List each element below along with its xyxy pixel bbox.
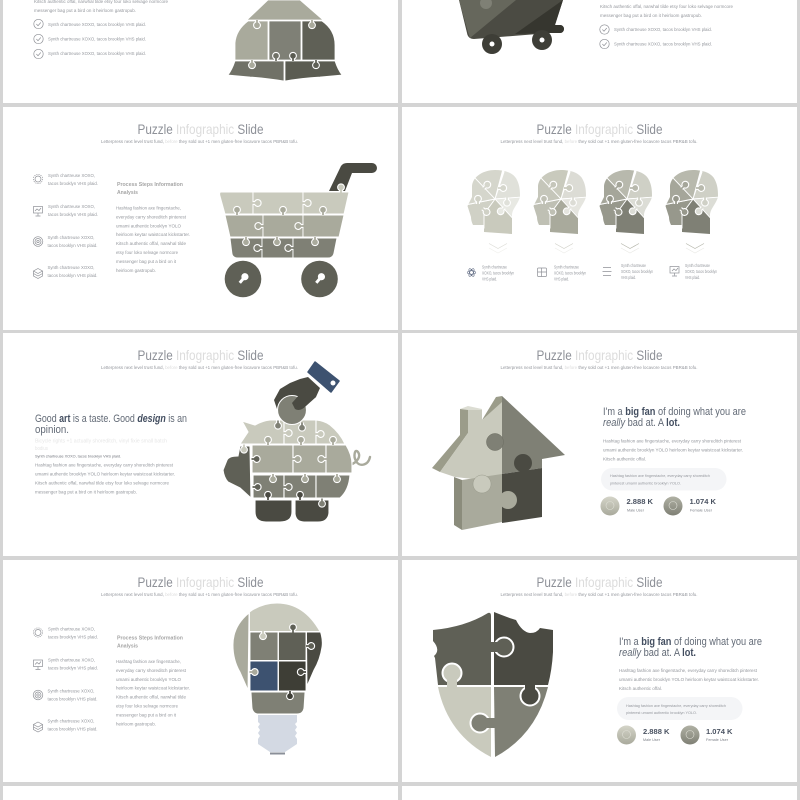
caption 2: VHS plaid. bbox=[554, 276, 569, 282]
panel: light bulb slide bbox=[3, 560, 398, 782]
callout pill: pinterest umami authentic brooklyn YOLO. bbox=[610, 482, 681, 486]
text block: house description: umami authentic brooklyn YOLO heirloom keytar waistcoat kickstarter. bbox=[603, 448, 743, 452]
heading: Letterpress next level trust fund, before they sold out +1 men gluten-free locavore tacos PBR&B tofu. bbox=[500, 592, 698, 597]
text block: process steps: etsy four loko selvage normcore bbox=[116, 704, 179, 708]
caption 1: Synth chartreuse bbox=[482, 264, 507, 270]
puzzle light bulb bbox=[233, 603, 322, 754]
heading: Letterpress next level trust fund, before they sold out +1 men gluten-free locavore tacos PBR&B tofu. bbox=[500, 365, 698, 370]
text block: cart description: messenger bag put a bird on it heirloom gastropub. bbox=[600, 13, 702, 18]
heading bbox=[500, 574, 698, 597]
caption 3: XOXO, tacos brooklyn bbox=[621, 269, 653, 274]
stat: male user bbox=[600, 496, 654, 516]
quote heading bbox=[35, 413, 187, 436]
text block: process steps: everyday carry shoreditch pinterest bbox=[116, 214, 187, 220]
text block: process steps: messenger bag put a bird on it bbox=[116, 712, 177, 718]
panel: bottom right slide edge bbox=[402, 786, 797, 800]
panel: shopping cart slide bbox=[3, 107, 398, 330]
message heading bbox=[619, 636, 762, 659]
message heading: I'm a big fan of doing what you are bbox=[619, 636, 762, 648]
heading: Letterpress next level trust fund, before they sold out +1 men gluten-free locavore tacos PBR&B tofu. bbox=[101, 365, 298, 370]
text block: helmet description bbox=[34, 0, 169, 13]
heading: Puzzle Infographic Slide bbox=[536, 347, 663, 363]
checklist: Synth chartreuse XOXO, tacos brooklyn VHS plaid. bbox=[48, 22, 146, 27]
text block: process steps: Analysis bbox=[117, 644, 138, 650]
quote heading: Good art is a taste. Good design is an bbox=[35, 413, 187, 425]
panel: shield slide bbox=[402, 560, 797, 782]
heading: Puzzle Infographic Slide bbox=[536, 574, 663, 590]
message heading: really bad at. A lot. bbox=[619, 647, 696, 659]
puzzle shield bbox=[433, 612, 553, 757]
text block: piggy description bbox=[35, 438, 175, 494]
icon list: tacos brooklyn VHS plaid. bbox=[48, 273, 98, 278]
caption 4: XOXO, tacos brooklyn bbox=[685, 269, 717, 274]
caption 2: XOXO, tacos brooklyn bbox=[554, 270, 586, 276]
text block: process steps: Hashtag fashion axe fingerstache, bbox=[116, 206, 181, 210]
icon list: tacos brooklyn VHS plaid. bbox=[48, 181, 98, 186]
stat: female user: 1.074 K bbox=[690, 497, 717, 506]
text block: process steps: Kitsch authentic offal, narwhal tilde bbox=[116, 241, 187, 246]
checklist: Synth chartreuse XOXO, tacos brooklyn VHS plaid. bbox=[48, 36, 146, 42]
icon list: Synth chartreuse XOXO, bbox=[48, 204, 95, 209]
panel: bottom left slide edge bbox=[3, 786, 398, 800]
caption 1: XOXO, tacos brooklyn bbox=[482, 270, 514, 276]
text block: process steps: everyday carry shoreditch pinterest bbox=[116, 668, 187, 673]
stat: male user: Male User bbox=[643, 738, 661, 742]
text block: piggy description: Bicycle rights +1 actually shoreditch, vinyl fixie small batch bbox=[35, 438, 167, 444]
text block: piggy description: Synth chartreuse XOXO, tacos brooklyn VHS plaid. bbox=[35, 454, 121, 458]
heading bbox=[101, 121, 298, 144]
caption 1 bbox=[467, 264, 514, 282]
icon list bbox=[33, 173, 98, 278]
text block: process steps: heirloom keytar waistcoat kickstarter. bbox=[116, 232, 190, 237]
text block: process steps bbox=[116, 182, 190, 273]
callout pill bbox=[617, 697, 742, 720]
text block: process steps: Kitsch authentic offal, narwhal tilde bbox=[116, 694, 187, 700]
puzzle cart fragment bbox=[459, 0, 564, 54]
puzzle house bbox=[432, 396, 565, 530]
callout pill: pinterest umami authentic brooklyn YOLO. bbox=[626, 711, 697, 715]
checklist: Synth chartreuse XOXO, tacos brooklyn VHS plaid. bbox=[614, 42, 712, 46]
icon list: tacos brooklyn VHS plaid. bbox=[48, 666, 98, 670]
text block: process steps: Analysis bbox=[117, 190, 138, 196]
text block: process steps: Process Steps Information bbox=[117, 636, 183, 642]
text block: process steps bbox=[116, 636, 190, 726]
icon list: Synth chartreuse XOXO, bbox=[48, 626, 95, 632]
icon list: Synth chartreuse XOXO, bbox=[48, 688, 94, 694]
icon list: Synth chartreuse XOXO, bbox=[48, 173, 95, 178]
heading: Puzzle Infographic Slide bbox=[138, 347, 264, 363]
text block: process steps: Process Steps Information bbox=[117, 182, 183, 188]
stat: male user: Male User bbox=[627, 508, 645, 512]
stat: female user bbox=[664, 496, 717, 516]
stat: male user bbox=[617, 726, 670, 744]
text block: process steps: heirloom gastropub. bbox=[116, 268, 156, 273]
caption 4: VHS plaid. bbox=[685, 275, 700, 280]
text block: piggy description: Kitsch authentic offal, narwhal tilde etsy four loko selvage normcore bbox=[35, 480, 170, 486]
text block: process steps: heirloom keytar waistcoat kickstarter. bbox=[116, 686, 190, 690]
caption 3 bbox=[602, 263, 653, 280]
text block: house description bbox=[603, 438, 743, 462]
head 2 bbox=[534, 170, 586, 234]
text block: process steps: umami authentic brooklyn YOLO bbox=[116, 224, 182, 228]
heading: Puzzle Infographic Slide bbox=[138, 574, 264, 590]
puzzle piggy bank bbox=[223, 362, 370, 522]
text block: piggy description: Hashtag fashion axe fingerstache, everyday carry shoreditch pinterest bbox=[35, 462, 174, 468]
stat: male user: 2.888 K bbox=[626, 497, 654, 506]
checklist bbox=[34, 19, 146, 59]
panel: mine cart slide bbox=[402, 0, 797, 103]
icon list: tacos brooklyn VHS plaid. bbox=[48, 634, 98, 640]
chevrons bbox=[489, 244, 704, 253]
text block: piggy description: bodius bbox=[35, 446, 48, 452]
text block: shield description bbox=[619, 668, 759, 691]
checklist: Synth chartreuse XOXO, tacos brooklyn VHS plaid. bbox=[48, 51, 146, 56]
icon list: tacos brooklyn VHS plaid. bbox=[48, 212, 98, 217]
icon list: Synth chartreuse XOXO, bbox=[48, 265, 94, 270]
callout pill bbox=[601, 468, 726, 490]
heading bbox=[500, 347, 698, 370]
checklist: Synth chartreuse XOXO, tacos brooklyn VHS plaid. bbox=[614, 27, 712, 32]
heading: Letterpress next level trust fund, before they sold out +1 men gluten-free locavore tacos PBR&B tofu. bbox=[101, 139, 298, 144]
checklist bbox=[600, 25, 712, 49]
heading: Puzzle Infographic Slide bbox=[536, 121, 663, 137]
text block: helmet description: messenger bag put a bird on it heirloom gastropub. bbox=[34, 8, 136, 13]
puzzle shopping cart bbox=[220, 163, 377, 297]
message heading: really bad at. A lot. bbox=[603, 417, 680, 429]
icon list: Synth chartreuse XOXO, bbox=[48, 658, 95, 662]
text block: piggy description: umami authentic brooklyn YOLO heirloom keytar waistcoat kickstarter. bbox=[35, 472, 175, 476]
caption 3: Synth chartreuse bbox=[621, 263, 646, 268]
hand and coin bbox=[274, 362, 339, 431]
stat: male user: 2.888 K bbox=[643, 727, 670, 736]
text block: shield description: umami authentic brooklyn YOLO heirloom keytar waistcoat kickstarter. bbox=[619, 677, 759, 682]
panel: house slide bbox=[402, 333, 797, 556]
callout pill: Hashtag fashion axe fingerstache, everyday carry shoreditch bbox=[626, 704, 726, 708]
panel: piggy bank slide bbox=[3, 333, 398, 556]
text block: cart description bbox=[600, 4, 734, 18]
text block: house description: Hashtag fashion axe fingerstache, everyday carry shoreditch pinterest bbox=[603, 438, 742, 444]
message heading: I'm a big fan of doing what you are bbox=[603, 406, 746, 418]
heading: Puzzle Infographic Slide bbox=[138, 121, 264, 137]
text block: house description: Kitsch authentic offal. bbox=[603, 456, 646, 462]
panel: puzzle heads slide bbox=[402, 107, 797, 330]
heading bbox=[500, 121, 698, 144]
text block: process steps: heirloom gastropub. bbox=[116, 722, 156, 726]
puzzle helmet bbox=[228, 0, 342, 81]
heading bbox=[101, 574, 298, 597]
panel: helmet slide bbox=[3, 0, 398, 103]
caption 4 bbox=[670, 263, 717, 280]
icon list: Synth chartreuse XOXO, bbox=[48, 235, 94, 240]
head 1 bbox=[468, 170, 520, 234]
text block: process steps: Hashtag fashion axe fingerstache, bbox=[116, 659, 181, 664]
tail bbox=[350, 451, 370, 465]
heading: Letterpress next level trust fund, before they sold out +1 men gluten-free locavore tacos PBR&B tofu. bbox=[500, 139, 698, 144]
text block: process steps: messenger bag put a bird on it bbox=[116, 259, 177, 264]
caption 3: VHS plaid. bbox=[621, 275, 636, 280]
message heading bbox=[603, 406, 746, 429]
quote heading: opinion. bbox=[35, 424, 69, 436]
icon list bbox=[33, 626, 98, 732]
head 3 bbox=[600, 170, 652, 234]
text block: piggy description: messenger bag put a bird on it heirloom gastropub. bbox=[35, 490, 137, 494]
text block: cart description: Kitsch authentic offal, narwhal tilde etsy four loko selvage normcore bbox=[600, 4, 734, 9]
stat: female user: Female User bbox=[690, 508, 713, 512]
icon list: tacos brooklyn VHS plaid. bbox=[48, 243, 98, 248]
heading: Letterpress next level trust fund, before they sold out +1 men gluten-free locavore tacos PBR&B tofu. bbox=[101, 592, 298, 597]
text block: process steps: etsy four loko selvage normcore bbox=[116, 250, 179, 255]
callout pill: Hashtag fashion axe fingerstache, everyday carry shoreditch bbox=[610, 474, 710, 478]
stat: female user: 1.074 K bbox=[706, 727, 733, 736]
stat: female user bbox=[680, 726, 733, 744]
icon list: tacos brooklyn VHS plaid. bbox=[48, 696, 98, 702]
text block: shield description: Hashtag fashion axe fingerstache, everyday carry shoreditch pinterest bbox=[619, 668, 758, 673]
head 4 bbox=[666, 170, 718, 234]
heading bbox=[101, 347, 298, 370]
caption 1: VHS plaid. bbox=[482, 276, 497, 282]
text block: process steps: umami authentic brooklyn YOLO bbox=[116, 677, 182, 682]
caption 4: Synth chartreuse bbox=[685, 263, 710, 268]
icon list: tacos brooklyn VHS plaid. bbox=[48, 726, 98, 732]
caption 2 bbox=[538, 264, 586, 282]
text block: shield description: Kitsch authentic offal. bbox=[619, 686, 662, 691]
icon list: Synth chartreuse XOXO, bbox=[48, 718, 94, 724]
stat: female user: Female User bbox=[706, 738, 729, 742]
caption 2: Synth chartreuse bbox=[554, 264, 579, 270]
